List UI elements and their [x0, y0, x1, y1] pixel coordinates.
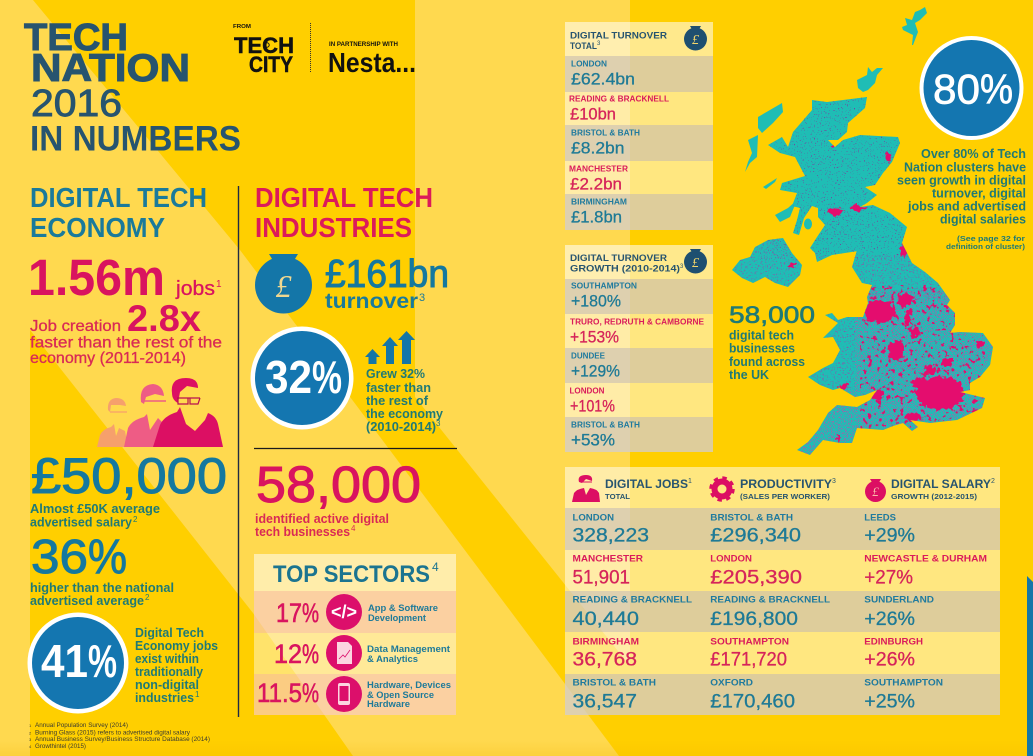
column: productivity: £171,720: [710, 649, 787, 671]
column: digital salary: SUNDERLAND: [864, 595, 934, 606]
panel: top sectors: [254, 554, 456, 715]
heading: turnover growth: [570, 253, 684, 274]
row: hardware: %: [302, 678, 319, 708]
text: grew 32%: faster than: [366, 381, 431, 395]
heading: digital tech industries: INDUSTRIES: [255, 212, 412, 243]
panel: digital turnover growth: +153%: [570, 328, 619, 346]
panel: digital turnover total: £62.4bn: [571, 70, 635, 88]
callout: 32% circle: %: [312, 351, 342, 403]
text: 58,000 across the UK: digital tech: [729, 328, 794, 342]
icon: three people: [97, 378, 223, 447]
text: over 80% of clusters: definition of cluster): [946, 242, 1026, 251]
text: grew 32%: (2010-2014): [366, 420, 436, 434]
column: digital salary: +27%: [864, 567, 913, 589]
column: productivity: OXFORD: [710, 678, 753, 689]
stat: 1.56m jobs: 1.56m: [28, 249, 165, 306]
row: app and software: App & Software: [368, 603, 438, 614]
row: data management: 12: [274, 639, 302, 669]
right edge blue strip: [1027, 576, 1033, 756]
column: digital salary: [864, 512, 987, 713]
icon: gear: [711, 478, 733, 500]
title: TECH: [24, 17, 128, 59]
icon: money bag: £: [692, 256, 699, 271]
panel: digital turnover total: £10bn: [570, 104, 616, 124]
icon: growth arrows: [365, 331, 415, 364]
stat: job creation 2.8x: faster than the rest of the: [30, 334, 222, 352]
text: grew 32%: [366, 367, 443, 434]
heading: digital jobs: TOTAL: [605, 492, 630, 501]
heading: digital jobs: 1: [688, 478, 692, 485]
logos: Tech City and Nesta: FROM: [233, 24, 251, 30]
stat: job creation 2.8x: Job creation: [30, 318, 121, 335]
stat: £50,000 salary: Almost £50K average: [30, 501, 160, 516]
column: productivity: READING & BRACKNELL: [710, 595, 830, 606]
column: productivity: LONDON: [710, 554, 752, 565]
row: hardware: [257, 676, 451, 712]
footnotes: 4: [29, 744, 32, 749]
text: digital tech economy jobs: [135, 626, 218, 705]
stat: 36% higher: %: [88, 531, 127, 584]
logos: Tech City and Nesta: [233, 23, 416, 78]
icon: person: [572, 475, 600, 502]
stat: 58,000 businesses: tech businesses: [255, 525, 350, 539]
heading: productivity: (SALES PER WORKER): [740, 492, 831, 501]
row: app and software: %: [302, 598, 319, 628]
callout: 80% circle: 80: [933, 66, 980, 112]
column: productivity: [710, 512, 830, 713]
text: digital tech economy jobs: non-digital: [135, 678, 199, 692]
panel: digital turnover total: [565, 22, 713, 230]
stat: £161bn turnover: turnover: [325, 290, 418, 313]
title: 2016: [31, 83, 122, 125]
row: data management: %: [302, 639, 319, 669]
heading: digital tech industries: [255, 182, 433, 243]
text: 58,000 across the UK: 58,000: [729, 302, 815, 329]
row: hardware: Hardware: [367, 699, 410, 710]
stat: 58,000 businesses: [255, 456, 421, 539]
column: digital salary: +25%: [864, 691, 915, 713]
map of the UK: [725, 7, 1000, 460]
logos: Tech City and Nesta: IN PARTNERSHIP WITH: [329, 42, 398, 48]
stat: £50,000 salary: £50,000: [31, 448, 227, 504]
heading: turnover total: 3: [597, 41, 601, 47]
footnotes: 1: [29, 723, 32, 728]
text: 58,000 across the UK: [729, 302, 815, 382]
column: digital salary: +26%: [864, 649, 915, 671]
stat: £161bn turnover: 3: [419, 292, 425, 304]
footnotes: 2: [29, 730, 32, 736]
text: 58,000 across the UK: the UK: [729, 368, 769, 382]
text: grew 32%: 3: [436, 419, 441, 428]
text: digital tech economy jobs: Digital Tech: [135, 626, 204, 640]
icon: money bag: £: [692, 33, 699, 48]
footnotes: Annual Population Survey (2014): [35, 723, 128, 729]
title: IN NUMBERS: [30, 120, 241, 158]
column: productivity: £296,340: [710, 525, 801, 547]
heading: turnover growth: DIGITAL TURNOVER: [570, 253, 667, 264]
heading: productivity: 3: [832, 478, 836, 485]
panel: digital turnover growth: +53%: [571, 430, 615, 450]
callout: 41% circle: %: [88, 635, 117, 687]
stat: £161bn turnover: [325, 253, 449, 313]
heading: digital jobs: [605, 478, 692, 501]
text: over 80% of clusters: digital salaries: [940, 212, 1026, 226]
heading: top sectors: 4: [432, 560, 439, 574]
text: digital tech economy jobs: exist within: [135, 652, 199, 666]
heading: turnover growth: 3: [680, 264, 684, 270]
stat: 36% higher: advertised average: [30, 593, 144, 608]
column: productivity: BRISTOL & BATH: [710, 512, 793, 524]
column: digital jobs: BRISTOL & BATH: [572, 678, 656, 689]
stat: job creation 2.8x: economy (2011-2014): [30, 350, 186, 367]
heading: turnover total: [570, 30, 667, 52]
stat: 36% higher: 36: [31, 531, 88, 584]
heading: digital tech industries: DIGITAL TECH: [255, 182, 433, 213]
column divider: [238, 186, 240, 717]
row: hardware: 11.5: [257, 678, 302, 708]
panel: digital turnover growth: SOUTHAMPTON: [571, 280, 637, 290]
stat: job creation 2.8x: [30, 298, 222, 367]
panel: digital turnover total: £1.8bn: [571, 208, 622, 226]
panel: digital turnover growth: LONDON: [570, 386, 604, 396]
column: productivity: £205,390: [710, 567, 802, 589]
row: app and software: [276, 594, 438, 630]
column: digital jobs: 51,901: [572, 567, 630, 589]
panel: digital turnover growth: DUNDEE: [571, 350, 605, 360]
heading: digital salary: 2: [991, 478, 995, 485]
text: grew 32%: the economy: [366, 407, 443, 421]
panel: digital turnover growth: BRISTOL & BATH: [571, 420, 640, 430]
logos: Tech City and Nesta: CITY: [249, 52, 293, 77]
stat: £50,000 salary: [30, 448, 227, 530]
text: over 80% of clusters: turnover, digital: [932, 186, 1026, 200]
icon: pink money bag: [865, 479, 886, 502]
logos: Tech City and Nesta: TECH: [234, 33, 294, 58]
title: NATION: [31, 47, 190, 90]
column: digital jobs: READING & BRACKNELL: [572, 595, 692, 606]
stat: 58,000 businesses: 4: [351, 524, 356, 533]
heading: digital tech economy: ECONOMY: [30, 212, 165, 243]
heading: digital salary: [891, 478, 995, 501]
panel: digital turnover total: £2.2bn: [570, 174, 622, 194]
text: over 80% of clusters: Nation clusters have: [904, 160, 1026, 174]
stat: 36% higher: higher than the national: [30, 580, 174, 595]
panel: digital turnover growth: +180%: [571, 292, 621, 310]
row: hardware: Hardware, Devices: [367, 680, 451, 691]
stat: 36% higher: 2: [145, 593, 150, 602]
column: digital jobs: 328,223: [572, 525, 649, 547]
stat: 1.56m jobs: 1: [216, 279, 222, 290]
text: digital tech economy jobs: traditionally: [135, 665, 203, 679]
stat: 58,000 businesses: identified active digital: [255, 512, 389, 526]
text: over 80% of clusters: seen growth in digital: [897, 174, 1026, 188]
heading: digital salary: GROWTH (2012-2015): [891, 492, 978, 501]
stat: £50,000 salary: advertised salary: [30, 514, 133, 530]
text: grew 32%: the rest of: [366, 394, 429, 408]
column: digital jobs: 40,440: [572, 608, 639, 630]
city clusters: [787, 143, 984, 440]
text: over 80% of clusters: (See page 32 for: [957, 234, 1025, 243]
callout: 41% circle: [28, 612, 128, 714]
icon: money bag: [684, 26, 707, 50]
column: productivity: £196,800: [710, 608, 798, 630]
heading: digital tech economy: [30, 182, 207, 243]
panel: digital turnover total: LONDON: [571, 58, 607, 68]
callout: 80% circle: %: [980, 66, 1013, 112]
row: hardware: & Open Source: [367, 690, 434, 701]
column: digital salary: NEWCASTLE & DURHAM: [864, 554, 987, 565]
footnotes: Growthintel (2015): [35, 744, 86, 750]
islands: [745, 7, 927, 230]
text: over 80% of clusters: Over 80% of Tech: [921, 147, 1026, 161]
callout: 41% circle: 41: [41, 635, 88, 687]
heading: turnover total: TOTAL: [570, 41, 597, 52]
footnotes: [29, 723, 210, 750]
panel: jobs, productivity and salary table: [565, 467, 1000, 715]
panel: digital turnover growth: +101%: [570, 396, 615, 416]
heading: productivity: PRODUCTIVITY: [740, 479, 832, 491]
icon: money bag: [684, 249, 707, 274]
heading: productivity: [740, 478, 836, 501]
stat: £50,000 salary: 2: [133, 515, 138, 524]
column: digital salary: +26%: [864, 608, 915, 630]
footnotes: Annual Business Survey/Business Structure Database (2014): [35, 737, 210, 743]
text: digital tech economy jobs: Economy jobs: [135, 639, 218, 653]
row: app and software: </>: [331, 602, 357, 622]
column: digital jobs: MANCHESTER: [572, 554, 643, 565]
logos: Tech City and Nesta: Nesta...: [328, 47, 416, 78]
mainland and Northern Ireland: [725, 90, 1000, 460]
text: 58,000 across the UK: businesses: [729, 342, 795, 356]
text: over 80% of clusters: [897, 147, 1026, 251]
text: digital tech economy jobs: industries: [135, 691, 194, 705]
callout: 32% circle: [250, 326, 354, 430]
panel: digital turnover total: BRISTOL & BATH: [571, 128, 640, 138]
stat: 36% higher: [30, 531, 174, 608]
panel: digital turnover growth: +129%: [571, 362, 620, 380]
column: digital salary: LEEDS: [864, 512, 896, 524]
text: grew 32%: Grew 32%: [366, 367, 425, 381]
column: digital jobs: 36,768: [572, 649, 637, 671]
heading: top sectors: TOP SECTORS: [273, 561, 430, 588]
heading: digital tech economy: DIGITAL TECH: [30, 182, 207, 213]
column: productivity: SOUTHAMPTON: [710, 637, 789, 648]
panel: digital turnover total: £8.2bn: [571, 138, 624, 158]
panel: digital turnover total: READING & BRACKNELL: [569, 94, 669, 104]
callout: 80% circle: [920, 36, 1024, 140]
heading: digital salary: DIGITAL SALARY: [891, 479, 991, 491]
stat: 1.56m jobs: jobs: [175, 278, 215, 300]
stat: job creation 2.8x: 2.8x: [127, 298, 201, 339]
panel: digital turnover growth: TRURO, REDRUTH & CAMBORNE: [570, 316, 704, 326]
column: digital jobs: LONDON: [572, 512, 614, 524]
stat: 58,000 businesses: 58,000: [256, 456, 421, 513]
panel: digital turnover total: BIRMINGHAM: [571, 196, 627, 206]
text: over 80% of clusters: jobs and advertised: [907, 200, 1026, 214]
column: digital jobs: BIRMINGHAM: [572, 637, 639, 648]
panel: digital turnover total: MANCHESTER: [569, 164, 628, 174]
icon: money bag: £: [276, 268, 292, 304]
heading: digital jobs: DIGITAL JOBS: [605, 479, 688, 491]
footnotes: 3: [29, 737, 32, 742]
panel: digital turnover growth: [565, 245, 713, 452]
row: data management: [274, 635, 451, 671]
stat: £161bn turnover: £161bn: [325, 253, 449, 296]
title: [24, 17, 241, 158]
icon: pink money bag: £: [872, 484, 879, 499]
column: digital jobs: 36,547: [572, 691, 637, 713]
column: digital salary: EDINBURGH: [864, 637, 923, 648]
heading: turnover total: DIGITAL TURNOVER: [570, 30, 667, 42]
text: 58,000 across the UK: found across: [729, 355, 805, 369]
column: productivity: £170,460: [710, 691, 795, 713]
callout: 32% circle: 32: [265, 351, 312, 403]
icon: money bag: [255, 254, 312, 314]
footnotes: Burning Glass (2015) refers to advertised digital salary: [35, 730, 190, 736]
row: data management: Data Management: [367, 644, 451, 655]
row: data management: & Analytics: [367, 654, 418, 665]
column: digital jobs: [572, 512, 692, 713]
column: digital salary: +29%: [864, 525, 915, 547]
heading: turnover growth: GROWTH (2010-2014): [570, 264, 680, 274]
text: digital tech economy jobs: 1: [195, 690, 200, 699]
column: digital salary: SOUTHAMPTON: [864, 678, 943, 689]
row: app and software: Development: [368, 613, 427, 624]
row: app and software: 17: [276, 598, 302, 628]
